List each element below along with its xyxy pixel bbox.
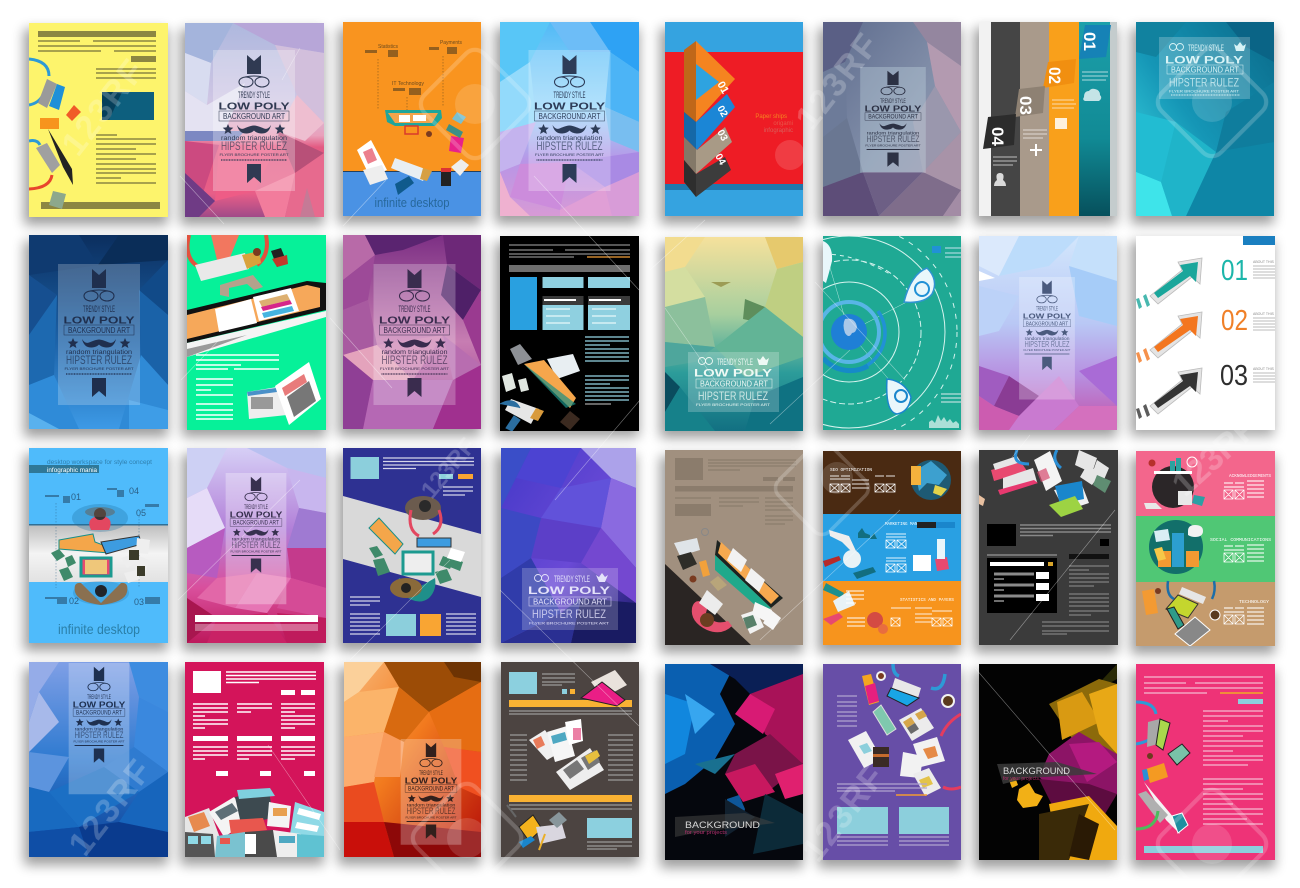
flyer: crimson layout with paper pile — [180, 662, 324, 865]
laptop — [581, 670, 627, 706]
poster title block: random triangulation — [382, 349, 448, 356]
horizontal title block: FLYER BROCHURE POSTER ART — [529, 620, 610, 626]
arrow 01: ABOUT THIS — [1253, 260, 1275, 264]
poster title block: HIPSTER RULEZ — [382, 353, 448, 367]
abstract shards — [665, 664, 803, 854]
stock photo watermarks: 123RF — [1165, 409, 1265, 504]
flyer: vertical stripes 01 to 04 — [974, 22, 1117, 224]
poster title block: LOW POLY — [64, 314, 134, 326]
poster title block — [374, 264, 456, 405]
poster title block: BACKGROUND ART — [868, 114, 918, 121]
flyer: dark brown layout with papers — [495, 662, 639, 865]
section headings: TECHNOLOGY — [1239, 599, 1269, 605]
number tags: 04 — [988, 127, 1007, 146]
right text column — [1069, 554, 1109, 559]
section headings: ACKNOWLEDGEMENTS — [1229, 473, 1271, 479]
arrow 02: ABOUT THIS — [1253, 312, 1275, 316]
caption tag: BACKGROUND — [1003, 766, 1071, 776]
flyer: black blue magenta abstract background — [660, 664, 803, 868]
wireframe X boxes — [830, 476, 952, 626]
flyer: lavender to magenta low poly poster — [182, 448, 326, 651]
horizontal title block: BACKGROUND ART — [1171, 66, 1239, 74]
flyer: sky blue workspace infographic — [24, 448, 168, 651]
numbered callouts: 04 — [129, 486, 139, 496]
poster title block: TRENDY STYLE — [554, 90, 586, 100]
desk objects — [357, 110, 469, 195]
intro block and lines — [987, 524, 1016, 546]
poster title block: LOW POLY — [379, 314, 450, 326]
poster title block: LOW POLY — [73, 701, 126, 710]
low poly facets — [979, 236, 1117, 430]
poster title block: BACKGROUND ART — [68, 326, 130, 335]
stock photo watermarks: 123RF — [788, 27, 886, 137]
text lines — [196, 355, 279, 419]
poster title block: LOW POLY — [1023, 312, 1071, 321]
flyer: dark grey desk web layout — [974, 450, 1118, 653]
poster title block: BACKGROUND ART — [538, 112, 601, 121]
arrow 03: 03 — [1220, 360, 1248, 392]
section headings: STATISTICS AND PAYERS — [900, 597, 954, 603]
footer title: infinite desktop — [374, 195, 450, 210]
poster title block: random triangulation — [1025, 336, 1070, 341]
desk objects — [29, 59, 81, 209]
wireframe X boxes — [1224, 481, 1264, 624]
caption tag: BACKGROUND — [685, 820, 761, 830]
numbered callouts: 02 — [69, 596, 79, 606]
arrow 01: 01 — [1221, 255, 1248, 287]
flyer: blue gradient low poly poster — [24, 662, 168, 865]
header tag: infographic mania — [47, 467, 97, 474]
origami ribbon steps: 01 — [714, 80, 731, 96]
poster title block: random triangulation — [232, 536, 281, 543]
poster title block: LOW POLY — [534, 100, 605, 112]
poster title block: BACKGROUND ART — [408, 787, 454, 793]
low poly facets — [500, 22, 639, 216]
numbered callouts: 05 — [136, 508, 146, 518]
origami ribbon steps: 02 — [714, 104, 730, 120]
mini data blocks — [929, 246, 961, 428]
callout labels: Statistics — [378, 44, 398, 50]
text lines — [837, 696, 949, 845]
flyer: black yellow magenta abstract background — [974, 664, 1117, 868]
flyer: violet low poly poster — [495, 448, 636, 651]
horizontal title block: LOW POLY — [528, 585, 611, 597]
low poly facets — [343, 235, 481, 429]
flyer: mint green desk layout — [182, 235, 326, 437]
horizontal title block — [688, 352, 779, 412]
poster title block: random triangulation — [221, 135, 287, 142]
callout labels: IT Technology — [392, 81, 425, 87]
flyer: pale blue to magenta low poly poster — [974, 236, 1117, 437]
poster title block: HIPSTER RULEZ — [867, 134, 920, 144]
section headings — [830, 467, 954, 603]
globe illustration — [911, 460, 951, 500]
low poly facets — [29, 662, 168, 857]
section headings: MARKETING MANAGEMENT — [885, 521, 935, 527]
poster title block: LOW POLY — [865, 105, 922, 114]
poster title block: BACKGROUND ART — [76, 711, 122, 717]
low poly facets — [665, 237, 803, 431]
desk scene — [674, 528, 783, 634]
poster title block: LOW POLY — [218, 100, 290, 112]
stock photo watermarks: 123RF — [61, 753, 159, 863]
horizontal title block — [522, 568, 618, 630]
header lines — [509, 245, 630, 257]
poster title block: HIPSTER RULEZ — [75, 730, 124, 740]
flyer: yellow green teal low poly — [660, 237, 803, 438]
low poly facets — [823, 22, 961, 216]
numbered callouts: 01 — [71, 492, 81, 502]
poster title block: FLYER BROCHURE POSTER ART — [73, 739, 125, 744]
poster title block: BACKGROUND ART — [233, 521, 279, 527]
poster title block: random triangulation — [867, 131, 920, 136]
poster title block — [213, 50, 295, 191]
footer title: infinite desktop — [58, 621, 140, 637]
number tags: 01 — [1080, 32, 1099, 51]
number tags — [983, 25, 1111, 149]
poster title block: BACKGROUND ART — [223, 112, 285, 121]
social circle illustration — [1149, 520, 1203, 574]
lower desk items — [507, 805, 567, 850]
globe — [819, 302, 885, 371]
poster title block: HIPSTER RULEZ — [66, 353, 132, 367]
picture block — [102, 92, 154, 120]
horizontal title block: LOW POLY — [1165, 54, 1244, 66]
form panel — [987, 558, 1057, 613]
horizontal title block: HIPSTER RULEZ — [1169, 76, 1239, 90]
poster title block: FLYER BROCHURE POSTER ART — [230, 549, 282, 554]
technology desk items — [1142, 581, 1220, 646]
text columns — [585, 337, 629, 400]
arrow 02 — [1136, 305, 1275, 363]
flyer: blue purple low poly poster — [495, 22, 639, 224]
papers — [247, 362, 321, 425]
arrow 02: 02 — [1221, 305, 1248, 337]
origami caption: infographic — [764, 128, 793, 134]
desk objects — [848, 664, 961, 796]
papers — [529, 719, 604, 790]
poster title block — [860, 67, 926, 173]
low poly facets — [29, 235, 168, 429]
poster title block: TRENDY STYLE — [244, 504, 268, 511]
poster title block: TRENDY STYLE — [1036, 306, 1058, 313]
poster title block — [58, 264, 140, 405]
flyer: black web layout — [495, 236, 639, 437]
poster title block — [226, 473, 286, 604]
abstract shards — [1009, 664, 1117, 860]
caption tag: for your projects — [685, 830, 728, 836]
white footer bars — [195, 615, 318, 622]
flyer: orange red low poly poster — [338, 662, 481, 865]
flyer: hot pink desk layout — [1131, 664, 1275, 868]
stock photo watermarks: 123RF — [416, 433, 482, 504]
horizontal title block: FLYER BROCHURE POSTER ART — [1169, 88, 1240, 94]
poster title block: random triangulation — [407, 802, 456, 809]
origami ribbon steps — [684, 41, 735, 197]
desk objects — [979, 450, 1111, 517]
callout labels: Payments — [440, 40, 462, 46]
low poly facets — [344, 662, 481, 857]
poster title block: BACKGROUND ART — [384, 326, 446, 335]
bookshelf circle illustration — [1144, 457, 1205, 509]
horizontal title block: BACKGROUND ART — [700, 380, 768, 388]
flyer: teal globe with orbit pins — [741, 224, 961, 440]
flyer: yellow desktop layout — [24, 23, 168, 225]
poster title block: HIPSTER RULEZ — [221, 139, 287, 153]
statistics illustration — [823, 583, 888, 634]
wireframe blocks — [675, 458, 796, 524]
callout labels — [365, 40, 462, 112]
marketing illustration — [823, 522, 955, 579]
flyer: pink low poly poster — [180, 23, 324, 225]
poster title block: TRENDY STYLE — [238, 90, 270, 100]
low poly facets — [1136, 22, 1274, 216]
horizontal title block: FLYER BROCHURE POSTER ART — [696, 402, 771, 407]
poster title block: TRENDY STYLE — [398, 304, 430, 314]
header: desktop workspace for style concept — [47, 459, 152, 466]
flyer: tan workspace layout — [660, 450, 803, 653]
origami ribbon steps: 03 — [714, 128, 730, 144]
location pins — [823, 241, 935, 414]
flyer: orange infinite desktop — [338, 22, 481, 224]
section headings — [1210, 473, 1271, 605]
flyer: navy blue low poly poster — [24, 235, 168, 437]
flyer: white arrows 01 02 03 — [1130, 236, 1275, 436]
low poly facets — [501, 448, 636, 643]
poster title block: HIPSTER RULEZ — [1025, 340, 1069, 349]
flyer: navy diagonal workspace — [338, 448, 481, 651]
person and keyboard — [188, 235, 288, 297]
poster title block: TRENDY STYLE — [83, 304, 115, 314]
horizontal title block: HIPSTER RULEZ — [698, 389, 768, 403]
low poly facets — [185, 23, 324, 217]
poster title block: FLYER BROCHURE POSTER ART — [865, 144, 921, 147]
origami ribbon steps: 04 — [712, 152, 728, 168]
poster title block: FLYER BROCHURE POSTER ART — [405, 815, 457, 820]
blue column and panels — [510, 277, 630, 330]
poster title block: HIPSTER RULEZ — [232, 540, 281, 550]
caption tag — [997, 762, 1097, 784]
caption tag: for your projects — [1003, 776, 1039, 782]
horizontal title block: HIPSTER RULEZ — [532, 607, 606, 621]
heading bars and text lines — [38, 31, 156, 37]
stripes — [991, 22, 1020, 216]
horizontal title block — [1159, 37, 1250, 99]
large monitor — [187, 281, 326, 357]
origami caption: origami — [773, 121, 793, 127]
flyer: three section marketing infographic — [818, 451, 961, 653]
arrow 03 — [1136, 360, 1275, 419]
poster title block — [1019, 277, 1075, 400]
poster title block: TRENDY STYLE — [419, 770, 443, 777]
low poly facets — [187, 448, 326, 643]
poster title block: FLYER BROCHURE POSTER ART — [220, 153, 289, 157]
flyer: red origami infographic — [660, 22, 803, 224]
horizontal title block: TRENDY STYLE — [1188, 43, 1224, 53]
horizontal title block: TRENDY STYLE — [717, 357, 753, 367]
orbit rings — [741, 224, 957, 440]
flyer: purple low poly poster — [338, 235, 481, 436]
origami caption — [755, 114, 793, 134]
paper pile illustration — [185, 788, 324, 857]
horizontal title block: LOW POLY — [694, 368, 773, 380]
flyer: purple desk layout — [818, 664, 961, 868]
numbered callouts: 03 — [134, 597, 144, 607]
horizontal title block: TRENDY STYLE — [554, 574, 590, 584]
poster title block: random triangulation — [75, 726, 124, 733]
poster title block: FLYER BROCHURE POSTER ART — [64, 367, 134, 371]
flyer: teal low poly poster — [1131, 22, 1274, 224]
stripe text lines and icons — [993, 72, 1108, 186]
poster title block — [69, 663, 129, 794]
poster title block: TRENDY STYLE — [87, 694, 111, 701]
workspace scene — [51, 504, 150, 605]
text lines — [1144, 677, 1263, 824]
poster title block — [401, 739, 461, 845]
section headings: SEO OPTIMIZATION — [830, 467, 872, 473]
workspace scene — [369, 496, 465, 602]
poster title block: random triangulation — [536, 135, 603, 142]
desk items — [500, 344, 580, 431]
origami caption: Paper ships — [755, 114, 787, 120]
horizontal title block: BACKGROUND ART — [533, 598, 607, 606]
desk objects — [1136, 702, 1190, 834]
numbered callouts — [45, 486, 160, 607]
blocks and lines — [350, 457, 476, 636]
light blue blocks — [837, 807, 888, 834]
poster title block: FLYER BROCHURE POSTER ART — [535, 153, 605, 157]
blocks and bars — [509, 672, 633, 849]
poster title block: FLYER BROCHURE POSTER ART — [1024, 348, 1071, 352]
stock photo watermarks: 123RF — [794, 759, 892, 869]
poster title block: random triangulation — [66, 349, 132, 356]
stock photo watermarks: 123RF — [54, 53, 152, 163]
caption tag — [675, 813, 775, 837]
arrow 03: ABOUT THIS — [1253, 367, 1275, 371]
flyer: grey violet low poly poster — [818, 22, 961, 224]
poster title block: LOW POLY — [230, 511, 283, 520]
poster title block: FLYER BROCHURE POSTER ART — [380, 367, 450, 371]
poster title block: HIPSTER RULEZ — [536, 139, 602, 153]
section headings: SOCIAL COMMUNICATIONS — [1210, 537, 1271, 543]
flyer: pink green tan infographic — [1131, 451, 1275, 654]
arrow 01 — [1136, 255, 1275, 309]
white blocks and lines — [193, 671, 316, 776]
number tags: 02 — [1045, 67, 1064, 84]
dark corner — [665, 564, 751, 645]
poster title block — [528, 50, 610, 191]
number tags: 03 — [1016, 96, 1035, 115]
poster title block: TRENDY STYLE — [880, 98, 906, 105]
poster title block: HIPSTER RULEZ — [407, 806, 456, 816]
poster title block: LOW POLY — [405, 777, 458, 786]
poster title block: BACKGROUND ART — [1026, 321, 1069, 327]
